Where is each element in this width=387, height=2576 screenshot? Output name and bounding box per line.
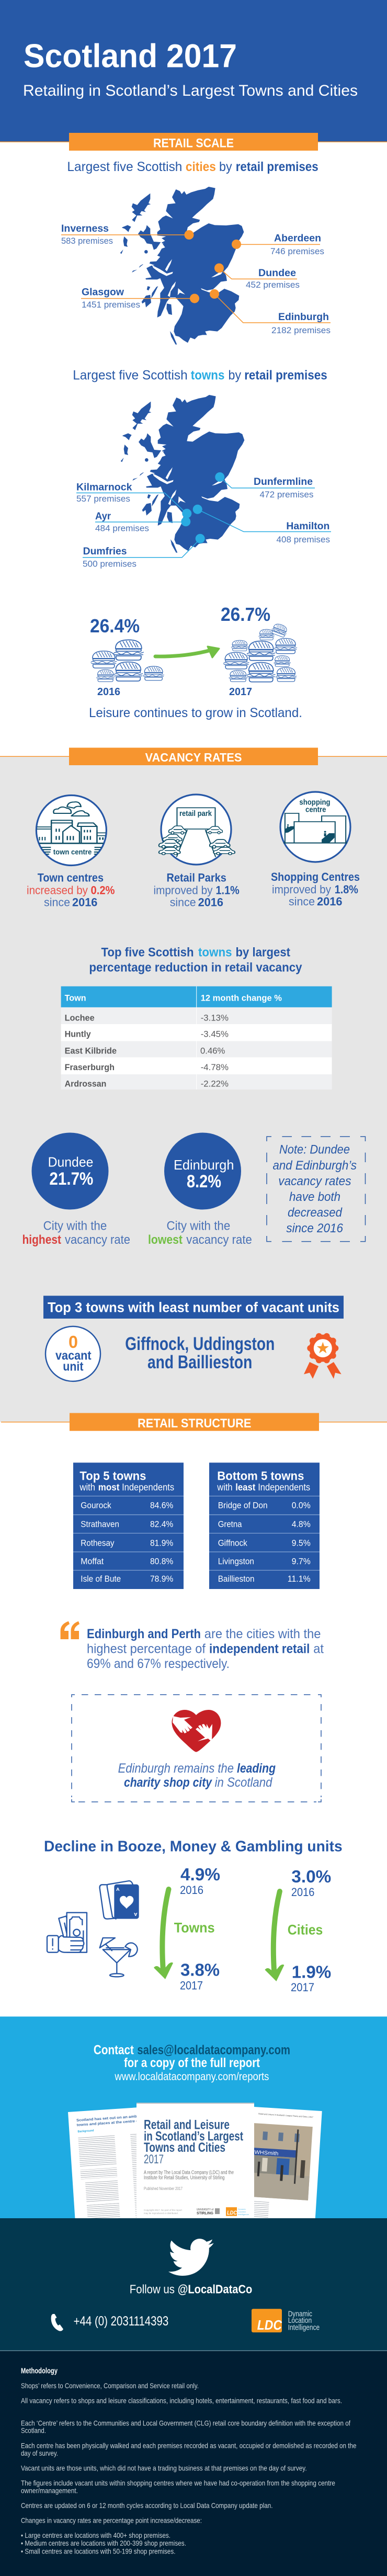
- text block: independent retail: highest percentage of: [87, 1642, 206, 1656]
- caption: highest vacancy: highest: [22, 1233, 61, 1247]
- stat: towns 2016: [180, 1865, 220, 1897]
- stat: cities 2017: 1.9%: [292, 1962, 331, 1982]
- icon: playing cards: A: [116, 1887, 120, 1892]
- text block: independent retail: [87, 1627, 324, 1671]
- table: vacancy reduction: -3.13%: [201, 1013, 229, 1023]
- text block: independent retail: at: [313, 1642, 324, 1656]
- text block: town centres: increased by: [27, 883, 88, 897]
- label: Aberdeen: Aberdeen: [274, 232, 321, 244]
- callout: note: decreased: [288, 1206, 343, 1220]
- text block: contact: [94, 2042, 290, 2083]
- table: vacancy reduction: Town: [65, 993, 86, 1003]
- table: top 5 independents: Strathaven: [81, 1520, 119, 1529]
- report cover: Copyright 2017. No part of the report: [144, 2209, 183, 2211]
- table: bottom 5 independents: 9.5%: [292, 1538, 311, 1548]
- text block: methodology: Centres are updated on 6 or 12 month cycles according to Local Data Company update plan.: [21, 2501, 273, 2510]
- caption: lowest vacancy: [148, 1219, 252, 1247]
- text block: methodology: • Medium centres are locations with 200-399 shop premises.: [21, 2539, 186, 2547]
- label: Dundee: 452 premises: [246, 280, 300, 290]
- report cover: Institute for Retail Studies, University of Stirling: [144, 2175, 224, 2181]
- heading: largest towns: towns: [191, 368, 224, 383]
- table: top 5 independents: 84.6%: [150, 1501, 174, 1511]
- caption: leisure: Leisure continues to grow in Scotland.: [89, 706, 302, 720]
- heading: decline in booze money gambling: Decline in Booze, Money & Gambling units: [44, 1839, 343, 1855]
- title: Scotland 2017: [24, 38, 237, 74]
- report cover: in Scotland’s Largest: [144, 2129, 244, 2143]
- arrow: leisure growth: [155, 646, 219, 657]
- section rule: vacancy: [0, 756, 387, 757]
- badge: 0 vacant unit: vacant: [55, 1349, 92, 1363]
- callout: charity shops: charity shop city: [124, 1775, 212, 1790]
- report cover: UNIVERSITY of: [197, 2208, 214, 2211]
- banner: retail structure: RETAIL STRUCTURE: [138, 1416, 251, 1431]
- subtitle: Retailing in Scotland’s Largest Towns and Cities: [23, 82, 358, 99]
- text block: retail parks: [154, 871, 240, 909]
- logo: LDC: Intelligence: [288, 2323, 320, 2332]
- label: Inverness: Inverness: [61, 223, 109, 234]
- icon: hand with money: [47, 1913, 87, 1953]
- table: bottom 5 independents: Giffnock: [218, 1538, 248, 1548]
- table: bottom 5 independents: Livingston: [218, 1557, 254, 1567]
- arrow: cities decline: [265, 1891, 284, 1981]
- logo: LDC: Location: [288, 2316, 312, 2325]
- text: phone number: +44 (0) 2031114393: [74, 2314, 168, 2329]
- report cover: Published November 2017: [144, 2186, 183, 2191]
- text block: methodology: [21, 2367, 357, 2555]
- text block: shopping centres: Shopping Centres: [271, 870, 360, 883]
- label: Glasgow: [82, 287, 140, 310]
- report cover: may be reproduced or distributed.: [144, 2212, 178, 2215]
- icon: retail park: [159, 795, 235, 865]
- table: bottom 5 independents: Bridge of Don: [218, 1501, 268, 1511]
- table: top 5 independents: 81.9%: [150, 1538, 174, 1548]
- label: Dunfermline: [254, 476, 314, 500]
- label: Kilmarnock: [76, 481, 132, 504]
- icon: burgers 2017: [223, 622, 297, 682]
- callout: charity shops: in Scotland: [215, 1775, 272, 1790]
- report cover: A report by The Local Data Company (LDC) and the: [144, 2170, 234, 2176]
- report cover: Retail and Leisure: [144, 2118, 230, 2132]
- label: Kilmarnock: Kilmarnock: [76, 481, 132, 493]
- icon: shopping centre: [280, 792, 350, 862]
- table: bottom 5 independents: 4.8%: [292, 1520, 311, 1529]
- table: vacancy reduction: Fraserburgh: [65, 1062, 115, 1072]
- text block: retail parks: Retail Parks: [166, 871, 226, 884]
- callout: charity shops: leading: [237, 1761, 276, 1776]
- heading: largest cities: by: [219, 160, 232, 174]
- heading: largest cities: Largest five Scottish: [67, 160, 182, 174]
- table: vacancy reduction: -4.78%: [201, 1062, 229, 1072]
- heading: largest towns: Largest five Scottish: [73, 368, 188, 383]
- table: vacancy reduction: 0.46%: [200, 1046, 225, 1056]
- callout: note: have both: [289, 1190, 340, 1204]
- text block: town centres: 0.2%: [91, 883, 115, 897]
- panel: methodology background: [0, 2351, 387, 2576]
- table: top 5 independents: Rothesay: [81, 1538, 115, 1548]
- table: vacancy reduction: Ardrossan: [65, 1079, 106, 1089]
- label: Dumfries: [83, 546, 136, 569]
- text block: contact: sales@localdatacompany.com: [137, 2042, 290, 2057]
- table: vacancy reduction: 12 month change %: [201, 993, 282, 1003]
- icon: rosette: [304, 1333, 342, 1379]
- label: Edinburgh: [271, 311, 331, 335]
- stat: towns 2017: 2017: [180, 1979, 203, 1992]
- heading: largest towns: retail premises: [244, 368, 327, 383]
- year label 2016: 2016: [97, 686, 120, 698]
- report cover: LDC: [227, 2210, 237, 2216]
- text block: methodology: The figures include vacant units within shopping centres where we have had co-operation from the shopping centre: [21, 2479, 335, 2487]
- icon: phone: [51, 2314, 63, 2331]
- heading: largest cities: [67, 160, 318, 174]
- callout: note: and Edinburgh’s: [273, 1159, 357, 1173]
- icon: town centre: [35, 795, 109, 865]
- text block: town centres: 2016: [72, 896, 97, 909]
- caption: highest vacancy: [22, 1219, 130, 1247]
- text block: retail parks: improved by: [154, 883, 213, 897]
- table: bottom 5 independents: Baillieston: [218, 1574, 254, 1584]
- text block: independent retail: independent retail: [209, 1642, 310, 1656]
- table: vacancy reduction: Huntly: [65, 1029, 91, 1039]
- label: Dunfermline: Dunfermline: [254, 476, 313, 487]
- table: top 5 independents: Independents: [122, 1482, 174, 1493]
- label: Dumfries: Dumfries: [83, 546, 127, 557]
- table: bottom 5 independents: 11.1%: [288, 1574, 311, 1584]
- label: Kilmarnock: 557 premises: [76, 494, 130, 504]
- heading: largest towns: by: [228, 368, 242, 383]
- table: top 5 independents: Gourock: [81, 1501, 112, 1511]
- table: bottom 5 independents: least: [235, 1482, 255, 1493]
- heading: top five towns: by largest: [235, 946, 290, 960]
- caption: highest vacancy: vacancy rate: [65, 1233, 130, 1247]
- label: cities: Cities: [288, 1922, 323, 1937]
- heading: top five towns: [89, 946, 302, 975]
- heading: largest cities: cities: [186, 160, 216, 174]
- icon: playing cards: A: [134, 1912, 138, 1917]
- label: Dundee: [246, 267, 300, 290]
- table: bottom 5 independents: Bottom 5 towns: [217, 1469, 304, 1482]
- label: Glasgow: Glasgow: [82, 287, 124, 298]
- text block: methodology: Vacant units are those units, which did not have a trading business at that premises on the day of survey.: [21, 2464, 307, 2472]
- logo: LDC: [252, 2309, 320, 2333]
- report page: right: [238, 2106, 322, 2237]
- icon: town centre: town centre: [53, 847, 92, 856]
- stat circle: Edinburgh: 8.2%: [187, 1172, 221, 1191]
- table: vacancy reduction: East Kilbride: [65, 1046, 117, 1056]
- table: top 5 independents: 82.4%: [150, 1520, 174, 1529]
- banner: top 3 towns: [43, 1296, 344, 1319]
- text block: contact: for a copy of the full report: [124, 2056, 260, 2070]
- label: Dumfries: 500 premises: [83, 559, 136, 569]
- badge: 0 vacant unit: [45, 1326, 100, 1381]
- city marker lines: [61, 235, 331, 323]
- heading: top five towns: towns: [198, 946, 232, 960]
- icon: shopping centre: centre: [305, 805, 326, 814]
- table: bottom 5 independents: 0.0%: [292, 1501, 311, 1511]
- text block: methodology: • Large centres are locations with 400+ shop premises.: [21, 2531, 170, 2539]
- label: Hamilton: 408 premises: [276, 535, 330, 544]
- callout: charity shops: Edinburgh remains the: [118, 1761, 234, 1776]
- table: bottom 5 independents: [209, 1462, 320, 1589]
- report page: right: Retail and Leisure in Scotland’s Largest Towns and Cities | 2017: [258, 2113, 314, 2118]
- banner: vacancy rates: VACANCY RATES: [145, 751, 242, 764]
- heading: top five towns: Top five Scottish: [101, 946, 194, 960]
- year label 2017: 2017: [229, 686, 252, 698]
- stat: towns 2017: [180, 1961, 220, 1992]
- banner: vacancy rates: [69, 748, 318, 765]
- table: top 5 independents: most: [98, 1482, 119, 1493]
- stat: towns 2016: 2016: [180, 1883, 203, 1897]
- table: vacancy reduction: Lochee: [65, 1013, 95, 1023]
- stat: 26.7%: 26.7%: [221, 604, 270, 625]
- heading: largest cities: retail premises: [236, 160, 318, 174]
- text block: retail parks: since: [170, 896, 196, 909]
- table: vacancy reduction: -3.45%: [201, 1029, 229, 1039]
- heading: top five towns: percentage reduction in retail vacancy: [89, 961, 302, 975]
- report page: left: Background: [77, 2129, 94, 2134]
- badge: 0 vacant unit: unit: [63, 1359, 84, 1374]
- section rule: retail structure: [1, 1422, 387, 1423]
- report cover: STIRLING: [197, 2210, 213, 2216]
- callout: note: Note: Dundee: [279, 1143, 350, 1157]
- callout: note: since 2016: [286, 1221, 344, 1235]
- table: bottom 5 independents: Gretna: [218, 1520, 242, 1529]
- text block: shopping centres: 2016: [317, 895, 342, 908]
- icon: twitter bird: [168, 2239, 214, 2276]
- text block: methodology: Scotland.: [21, 2426, 46, 2435]
- report cover: [136, 2103, 254, 2218]
- stat circle: Dundee: Dundee: [48, 1154, 93, 1170]
- logo: LDC: LDC: [257, 2317, 282, 2333]
- caption: lowest vacancy: lowest: [148, 1233, 183, 1247]
- text: top 3 towns: Giffnock, Uddingston: [125, 1334, 275, 1354]
- text block: retail parks: 2016: [198, 896, 223, 909]
- text block: town centres: since: [44, 896, 70, 909]
- text: follow us: Follow us: [130, 2282, 175, 2296]
- badge: 0 vacant unit: 0: [69, 1332, 78, 1352]
- label: Aberdeen: 746 premises: [270, 246, 324, 256]
- table: top 5 independents: 80.8%: [150, 1557, 174, 1567]
- text block: methodology: day of survey.: [21, 2449, 58, 2457]
- stat: towns 2016: 4.9%: [180, 1865, 220, 1885]
- stat: cities 2017: 2017: [291, 1981, 314, 1994]
- town marker lines: [76, 477, 331, 558]
- icon: playing cards: [100, 1881, 139, 1919]
- stat: cities 2016: [291, 1867, 331, 1899]
- caption: highest vacancy: City with the: [43, 1219, 107, 1233]
- label: Hamilton: Hamilton: [286, 520, 329, 532]
- text block: shopping centres: [271, 870, 360, 908]
- table: top 5 independents: with: [79, 1482, 95, 1493]
- label: towns: Towns: [174, 1920, 215, 1936]
- photo: high street: [246, 2123, 313, 2200]
- label: Glasgow: 1451 premises: [82, 300, 140, 310]
- map: cities: [120, 187, 244, 345]
- text block: methodology: Methodology: [21, 2367, 58, 2375]
- stat: towns 2017: 3.8%: [180, 1961, 220, 1980]
- text block: methodology: Changes in vacancy rates are percentage point increase/decrease:: [21, 2516, 202, 2524]
- icon: shopping centre: shopping: [299, 798, 331, 807]
- text block: shopping centres: since: [289, 895, 315, 908]
- label: Hamilton: [276, 520, 330, 544]
- table: top 5 independents: Moffat: [81, 1557, 104, 1567]
- label: Inverness: 583 premises: [61, 236, 113, 246]
- table: vacancy reduction: [61, 986, 332, 1090]
- table: top 5 independents: Top 5 towns: [79, 1469, 146, 1482]
- report cover: Dynamic: [238, 2208, 246, 2210]
- label: Ayr: Ayr: [95, 510, 111, 522]
- photo: high street: WHSmith: [254, 2150, 279, 2157]
- report cover: Intelligence: [238, 2213, 249, 2216]
- text: follow us: @LocalDataCo: [178, 2282, 252, 2296]
- panel: contact background: [0, 2016, 387, 2218]
- text block: shopping centres: 1.8%: [335, 883, 358, 896]
- banner: retail scale: [69, 133, 318, 151]
- text block: retail parks: 1.1%: [215, 883, 240, 897]
- icon: burgers 2016: [91, 640, 164, 682]
- text block: contact: www.localdatacompany.com/reports: [115, 2071, 269, 2083]
- report cover: 2017: [144, 2152, 164, 2166]
- text: top 3 towns: [125, 1334, 275, 1372]
- stat circle: Dundee: [31, 1133, 109, 1209]
- callout: charity shops: [72, 1695, 321, 1802]
- logo: LDC: Dynamic: [288, 2309, 312, 2318]
- report cover: Towns and Cities: [144, 2140, 225, 2155]
- text block: independent retail: Edinburgh and Perth: [87, 1627, 201, 1641]
- table: top 5 independents: [73, 1462, 184, 1589]
- table: bottom 5 independents: Independents: [258, 1482, 310, 1493]
- text block: shopping centres: improved by: [272, 883, 332, 896]
- label: Aberdeen: [270, 232, 324, 256]
- arrow: towns decline: [154, 1889, 173, 1979]
- text block: independent retail: 69% and 67% respectively.: [87, 1656, 230, 1671]
- report cover: Location: [238, 2210, 246, 2213]
- header background: [0, 0, 387, 142]
- heading: largest towns: [73, 368, 327, 383]
- map: towns: [121, 395, 244, 553]
- icon: retail park: retail park: [179, 810, 212, 818]
- text block: methodology: • Small centres are locations with 50-199 shop premises.: [21, 2547, 176, 2555]
- text block: contact: Contact: [94, 2042, 134, 2057]
- section rule: retail scale: [0, 141, 387, 142]
- label: Inverness: [61, 223, 113, 246]
- callout: note: [267, 1137, 365, 1242]
- stat circle: Edinburgh: Edinburgh: [174, 1157, 234, 1173]
- table: bottom 5 independents: with: [217, 1482, 233, 1493]
- town markers: [181, 472, 224, 543]
- icon: heart with hands: [172, 1710, 221, 1752]
- text: follow us: [130, 2282, 252, 2296]
- banner: retail scale: RETAIL SCALE: [153, 136, 234, 151]
- text: top 3 towns: and Baillieston: [147, 1352, 252, 1372]
- stat: cities 2016: 3.0%: [291, 1867, 331, 1887]
- table: top 5 independents: Isle of Bute: [81, 1574, 121, 1584]
- table: bottom 5 independents: 9.7%: [292, 1557, 311, 1567]
- stat: cities 2017: [291, 1962, 331, 1994]
- text block: town centres: Town centres: [38, 871, 104, 884]
- label: Dunfermline: 472 premises: [259, 490, 314, 500]
- caption: lowest vacancy: vacancy rate: [186, 1233, 252, 1247]
- label: Ayr: 484 premises: [95, 523, 149, 534]
- banner: retail structure: [70, 1413, 319, 1431]
- icon: quote mark: [61, 1621, 79, 1639]
- panel: footer background: [0, 2218, 387, 2351]
- panel: vacancy background: [0, 756, 387, 1422]
- banner: top 3 towns: Top 3 towns with least number of vacant units: [48, 1299, 339, 1315]
- stat circle: Edinburgh: [164, 1133, 241, 1209]
- report page: left: towns and places at the centre c: [76, 2119, 139, 2127]
- caption: lowest vacancy: City with the: [166, 1219, 230, 1233]
- report page: left: [68, 2107, 147, 2225]
- text block: independent retail: are the cities with the: [204, 1627, 321, 1641]
- label: Dundee: Dundee: [258, 267, 296, 279]
- label: Edinburgh: 2182 premises: [271, 325, 331, 335]
- city markers: [184, 230, 241, 303]
- text block: methodology: Shops’ refers to Convenience, Comparison and Service retail only.: [21, 2381, 199, 2390]
- label: Ayr: [95, 510, 149, 534]
- text block: town centres: [27, 871, 115, 909]
- stat circle: Dundee: 21.7%: [49, 1169, 93, 1189]
- table: vacancy reduction: -2.22%: [201, 1079, 229, 1089]
- stat: cities 2016: 2016: [291, 1886, 314, 1899]
- report page: left: Scotland has set out on an ambi: [76, 2115, 138, 2123]
- label: Edinburgh: Edinburgh: [278, 311, 329, 323]
- icon: cocktail: [100, 1938, 138, 1977]
- stat: 26.4%: 26.4%: [90, 615, 140, 637]
- table: top 5 independents: 78.9%: [150, 1574, 174, 1584]
- text block: methodology: owner/management.: [21, 2486, 78, 2494]
- callout: note: vacancy rates: [278, 1174, 351, 1188]
